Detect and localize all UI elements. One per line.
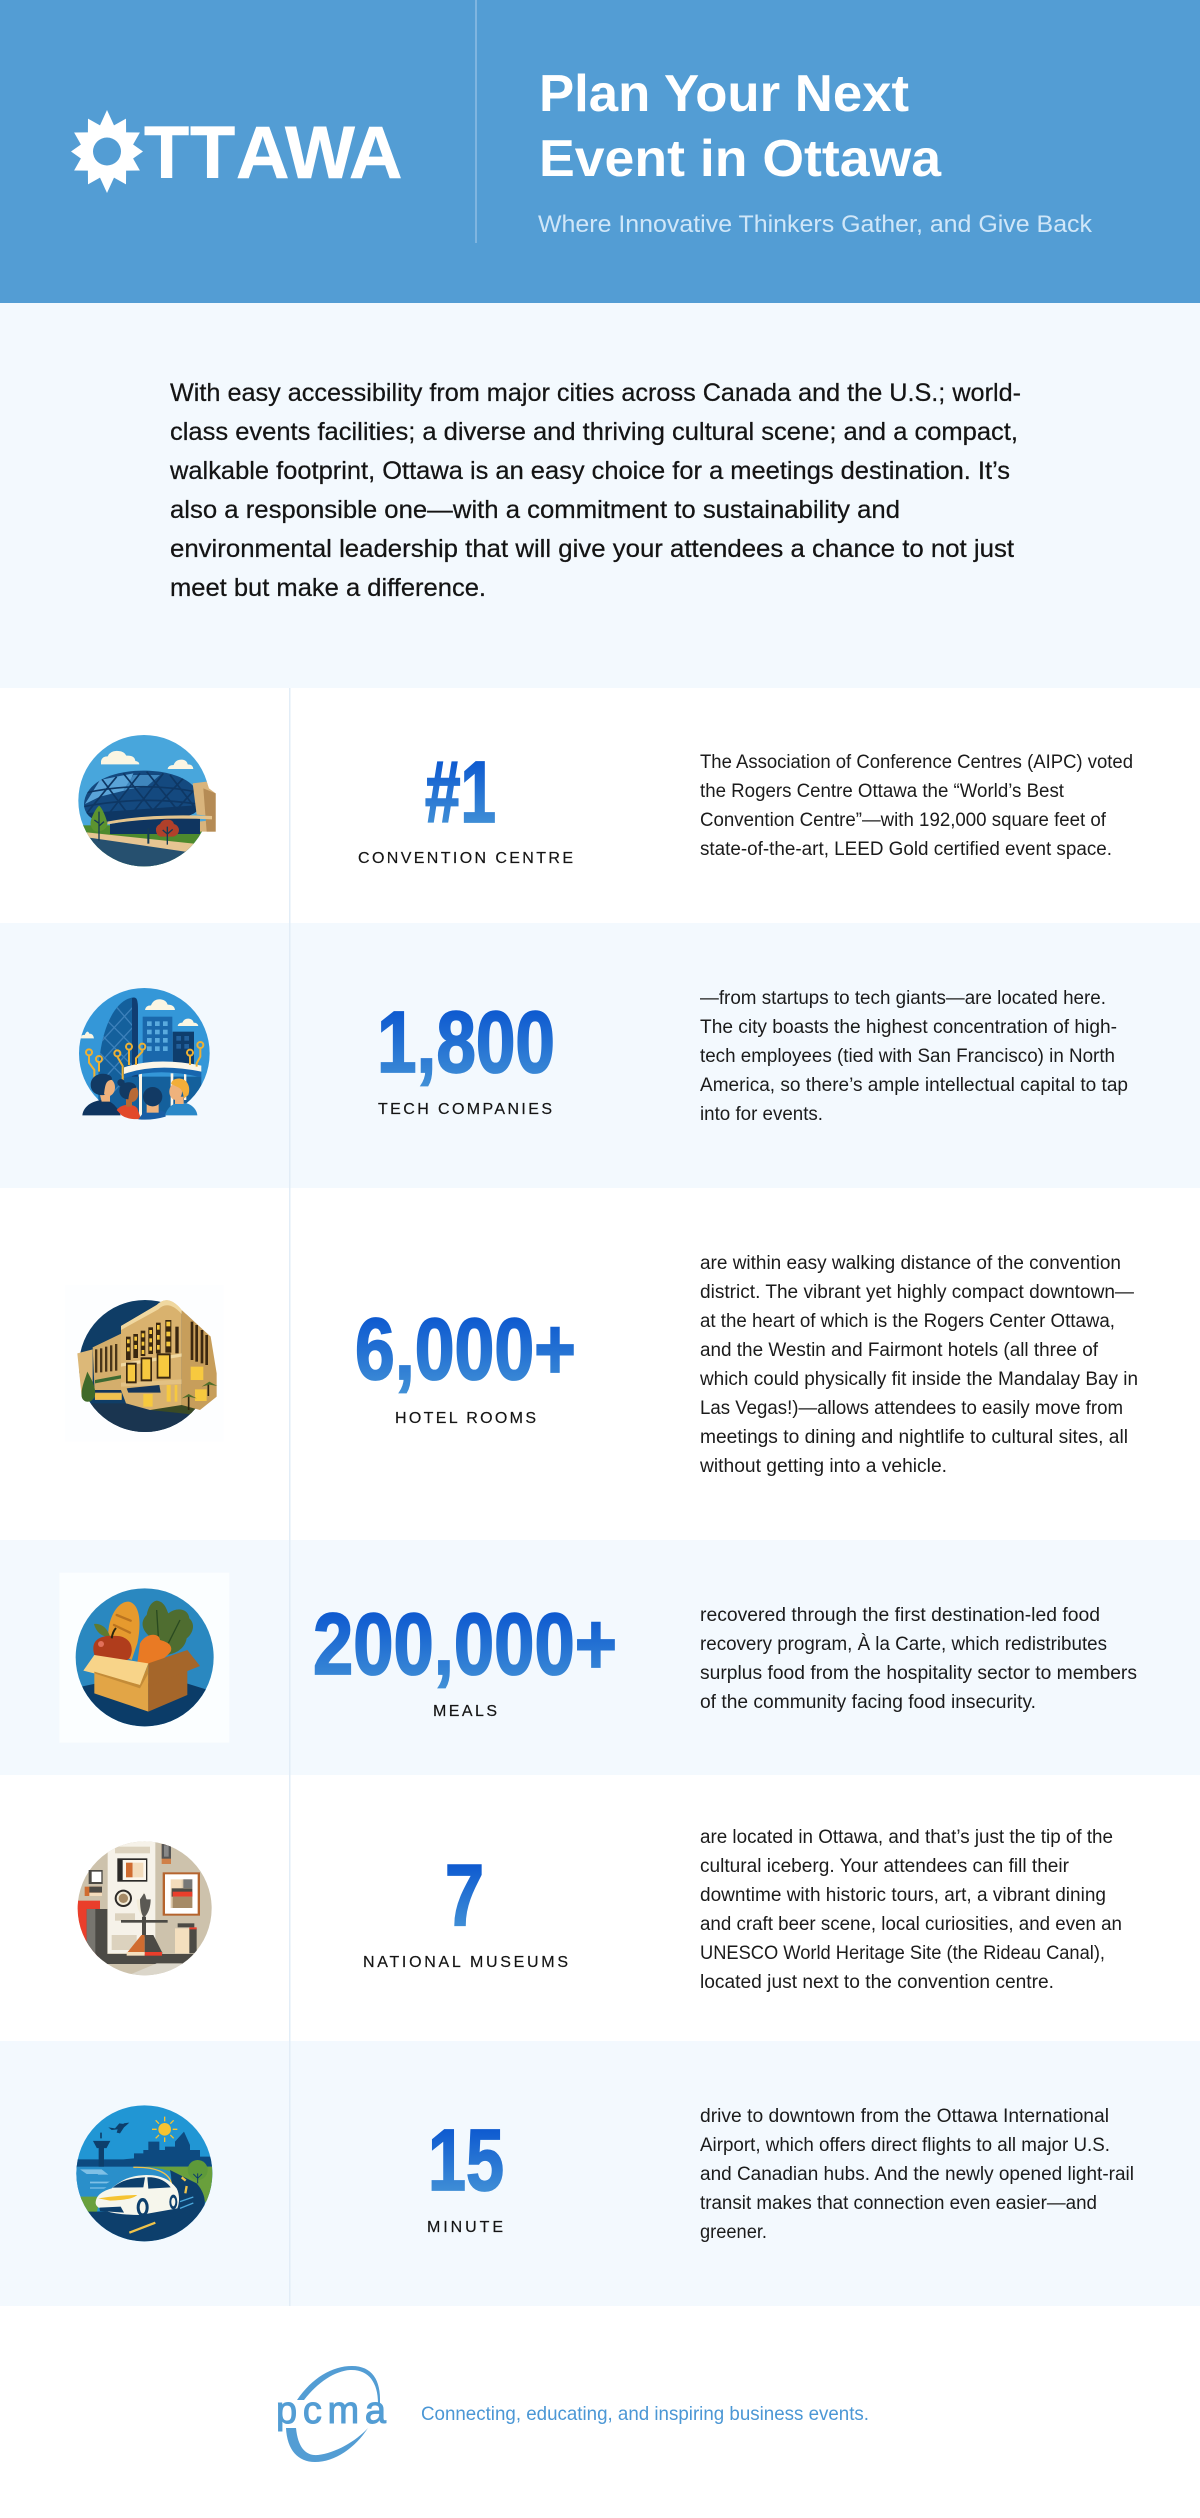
description: recovered through the first destination-led food xyxy=(700,1605,1100,1626)
description: which could physically fit inside the Mandalay Bay in xyxy=(699,1369,1138,1390)
description: the Rogers Centre Ottawa the “World’s Best xyxy=(700,781,1065,802)
intro text: With easy accessibility from major cities across Canada and the U.S.; world- xyxy=(170,379,1021,407)
description: greener. xyxy=(700,2222,767,2243)
description xyxy=(700,988,1128,1125)
description: are located in Ottawa, and that’s just the tip of the xyxy=(700,1827,1113,1848)
icon: tech city and people xyxy=(79,988,210,1120)
title: Plan Your Next xyxy=(539,65,909,123)
panel: hotel rooms xyxy=(65,1253,1138,1477)
description: cultural iceberg. Your attendees can fill their xyxy=(700,1856,1070,1877)
description: The Association of Conference Centres (AIPC) voted xyxy=(700,752,1133,773)
label: tech companies: TECH COMPANIES xyxy=(378,1101,552,1118)
title: Event in Ottawa xyxy=(539,130,942,188)
stat: 200,000+: 200,000+ xyxy=(313,1596,617,1693)
description: tech employees (tied with San Francisco) in North xyxy=(700,1046,1115,1067)
panel: intro xyxy=(0,303,1200,688)
title xyxy=(539,65,942,188)
description: Las Vegas!)—allows attendees to easily move from xyxy=(700,1398,1123,1419)
label: minute: MINUTE xyxy=(427,2219,503,2236)
description: at the heart of which is the Rogers Center Ottawa, xyxy=(700,1311,1115,1332)
icon: car and airport xyxy=(75,2105,215,2243)
description: located just next to the convention centre. xyxy=(700,1972,1054,1993)
description xyxy=(700,1827,1122,1993)
label: meals: MEALS xyxy=(433,1703,497,1720)
intro text xyxy=(169,379,1021,602)
description: UNESCO World Heritage Site (the Rideau Canal), xyxy=(700,1943,1105,1964)
description xyxy=(699,1253,1138,1477)
panel: museums xyxy=(75,1827,1122,1993)
intro text: also a responsible one—with a commitment to sustainability and xyxy=(170,496,900,524)
description: and the Westin and Fairmont hotels (all three of xyxy=(700,1340,1099,1361)
description: transit makes that connection even easier—and xyxy=(700,2193,1097,2214)
subtitle: Where Innovative Thinkers Gather, and Give Back xyxy=(538,211,1093,238)
description: and Canadian hubs. And the newly opened light-rail xyxy=(700,2164,1134,2185)
intro text: meet but make a difference. xyxy=(170,574,486,602)
description: of the community facing food insecurity. xyxy=(700,1692,1036,1713)
icon: convention centre xyxy=(77,735,216,880)
intro text: environmental leadership that will give your attendees a chance to not just xyxy=(170,535,1014,563)
intro text: class events facilities; a diverse and thriving cultural scene; and a compact, xyxy=(170,418,1018,446)
description: are within easy walking distance of the convention xyxy=(700,1253,1121,1274)
description: without getting into a vehicle. xyxy=(699,1456,947,1477)
panel: minute drive xyxy=(75,2105,1134,2243)
description: The city boasts the highest concentration of high- xyxy=(700,1017,1117,1038)
description: recovery program, À la Carte, which redistributes xyxy=(700,1634,1107,1655)
description: district. The vibrant yet highly compact downtown— xyxy=(700,1282,1134,1303)
description: surplus food from the hospitality sector to members xyxy=(700,1663,1137,1684)
description xyxy=(700,2106,1134,2243)
panel: header banner xyxy=(0,0,1200,303)
label: convention centre: CONVENTION CENTRE xyxy=(358,850,573,867)
icon: hotel xyxy=(77,1300,218,1432)
footer xyxy=(276,2366,869,2462)
stat: #1: #1 xyxy=(425,744,496,841)
logo: pcma: pcma xyxy=(276,2390,387,2432)
label: national museums: NATIONAL MUSEUMS xyxy=(363,1954,568,1971)
description: drive to downtown from the Ottawa International xyxy=(700,2106,1109,2127)
panel: convention centre xyxy=(77,735,1133,880)
logo: pcma xyxy=(276,2366,387,2462)
description: state-of-the-art, LEED Gold certified event space. xyxy=(700,839,1112,860)
stat: 6,000+: 6,000+ xyxy=(355,1301,576,1398)
description: downtime with historic tours, art, a vibrant dining xyxy=(700,1885,1106,1906)
row backgrounds xyxy=(0,688,1200,2306)
panel: tech companies xyxy=(79,988,1128,1125)
stat: 7: 7 xyxy=(445,1847,484,1944)
logo: Ottawa: TTAWA xyxy=(144,111,402,194)
description: America, so there’s ample intellectual capital to tap xyxy=(700,1075,1128,1096)
stat: 15: 15 xyxy=(428,2112,504,2209)
description: and craft beer scene, local curiosities, and even an xyxy=(700,1914,1122,1935)
label: hotel rooms: HOTEL ROOMS xyxy=(395,1410,536,1427)
description: Convention Centre”—with 192,000 square feet of xyxy=(700,810,1107,831)
description: Airport, which offers direct flights to all major U.S. xyxy=(700,2135,1110,2156)
icon: museum xyxy=(75,1840,213,1980)
tagline: Connecting, educating, and inspiring business events. xyxy=(421,2403,869,2425)
description: —from startups to tech giants—are located here. xyxy=(700,988,1106,1009)
icon: food box xyxy=(76,1588,214,1726)
description: meetings to dining and nightlife to cultural sites, all xyxy=(700,1427,1128,1448)
stat: 1,800: 1,800 xyxy=(377,994,555,1091)
intro text: walkable footprint, Ottawa is an easy choice for a meetings destination. It’s xyxy=(169,457,1010,485)
description xyxy=(700,1605,1137,1713)
description: into for events. xyxy=(700,1104,823,1125)
description xyxy=(700,752,1133,860)
panel: meals xyxy=(76,1588,1136,1726)
